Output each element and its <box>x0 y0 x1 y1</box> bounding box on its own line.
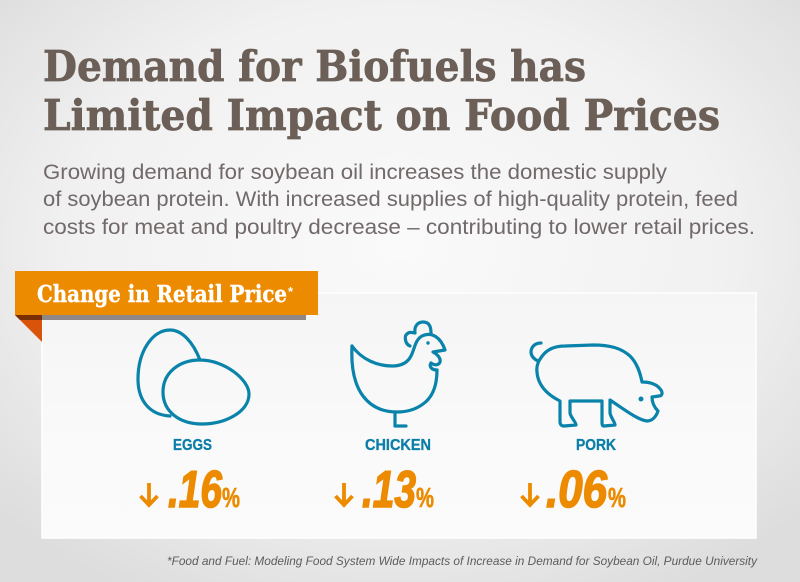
icon: pig <box>531 343 662 426</box>
banner <box>15 271 318 315</box>
icon: chicken <box>352 322 445 426</box>
intro text <box>43 161 755 239</box>
ribbon fold <box>15 315 42 342</box>
banner: * <box>288 284 294 299</box>
stat: chicken: .13 <box>362 461 416 519</box>
stat: pork: % <box>608 482 626 513</box>
stat: pork <box>522 461 626 519</box>
title: Limited Impact on Food Prices <box>43 91 720 140</box>
label: chicken: CHICKEN <box>365 437 431 454</box>
stat: pork: .06 <box>546 461 608 519</box>
stat: eggs: % <box>222 482 240 513</box>
title <box>43 42 720 140</box>
label: eggs: EGGS <box>173 437 212 454</box>
banner shadow <box>42 315 306 320</box>
label: pork: PORK <box>576 437 616 454</box>
icon: eggs <box>138 330 249 424</box>
intro text: costs for meat and poultry decrease – contributing to lower retail prices. <box>43 216 755 239</box>
panel: change in retail price <box>15 271 756 538</box>
footnote: *Food and Fuel: Modeling Food System Wide Impacts of Increase in Demand for Soybean Oil, Purdue University <box>167 554 758 568</box>
intro text: Growing demand for soybean oil increases the domestic supply <box>43 161 668 184</box>
stat: eggs: .16 <box>168 461 223 519</box>
stat: chicken: % <box>416 482 434 513</box>
banner: Change in Retail Price <box>37 281 287 308</box>
intro text: of soybean protein. With increased supplies of high-quality protein, feed <box>43 188 738 211</box>
title: Demand for Biofuels has <box>43 42 586 91</box>
